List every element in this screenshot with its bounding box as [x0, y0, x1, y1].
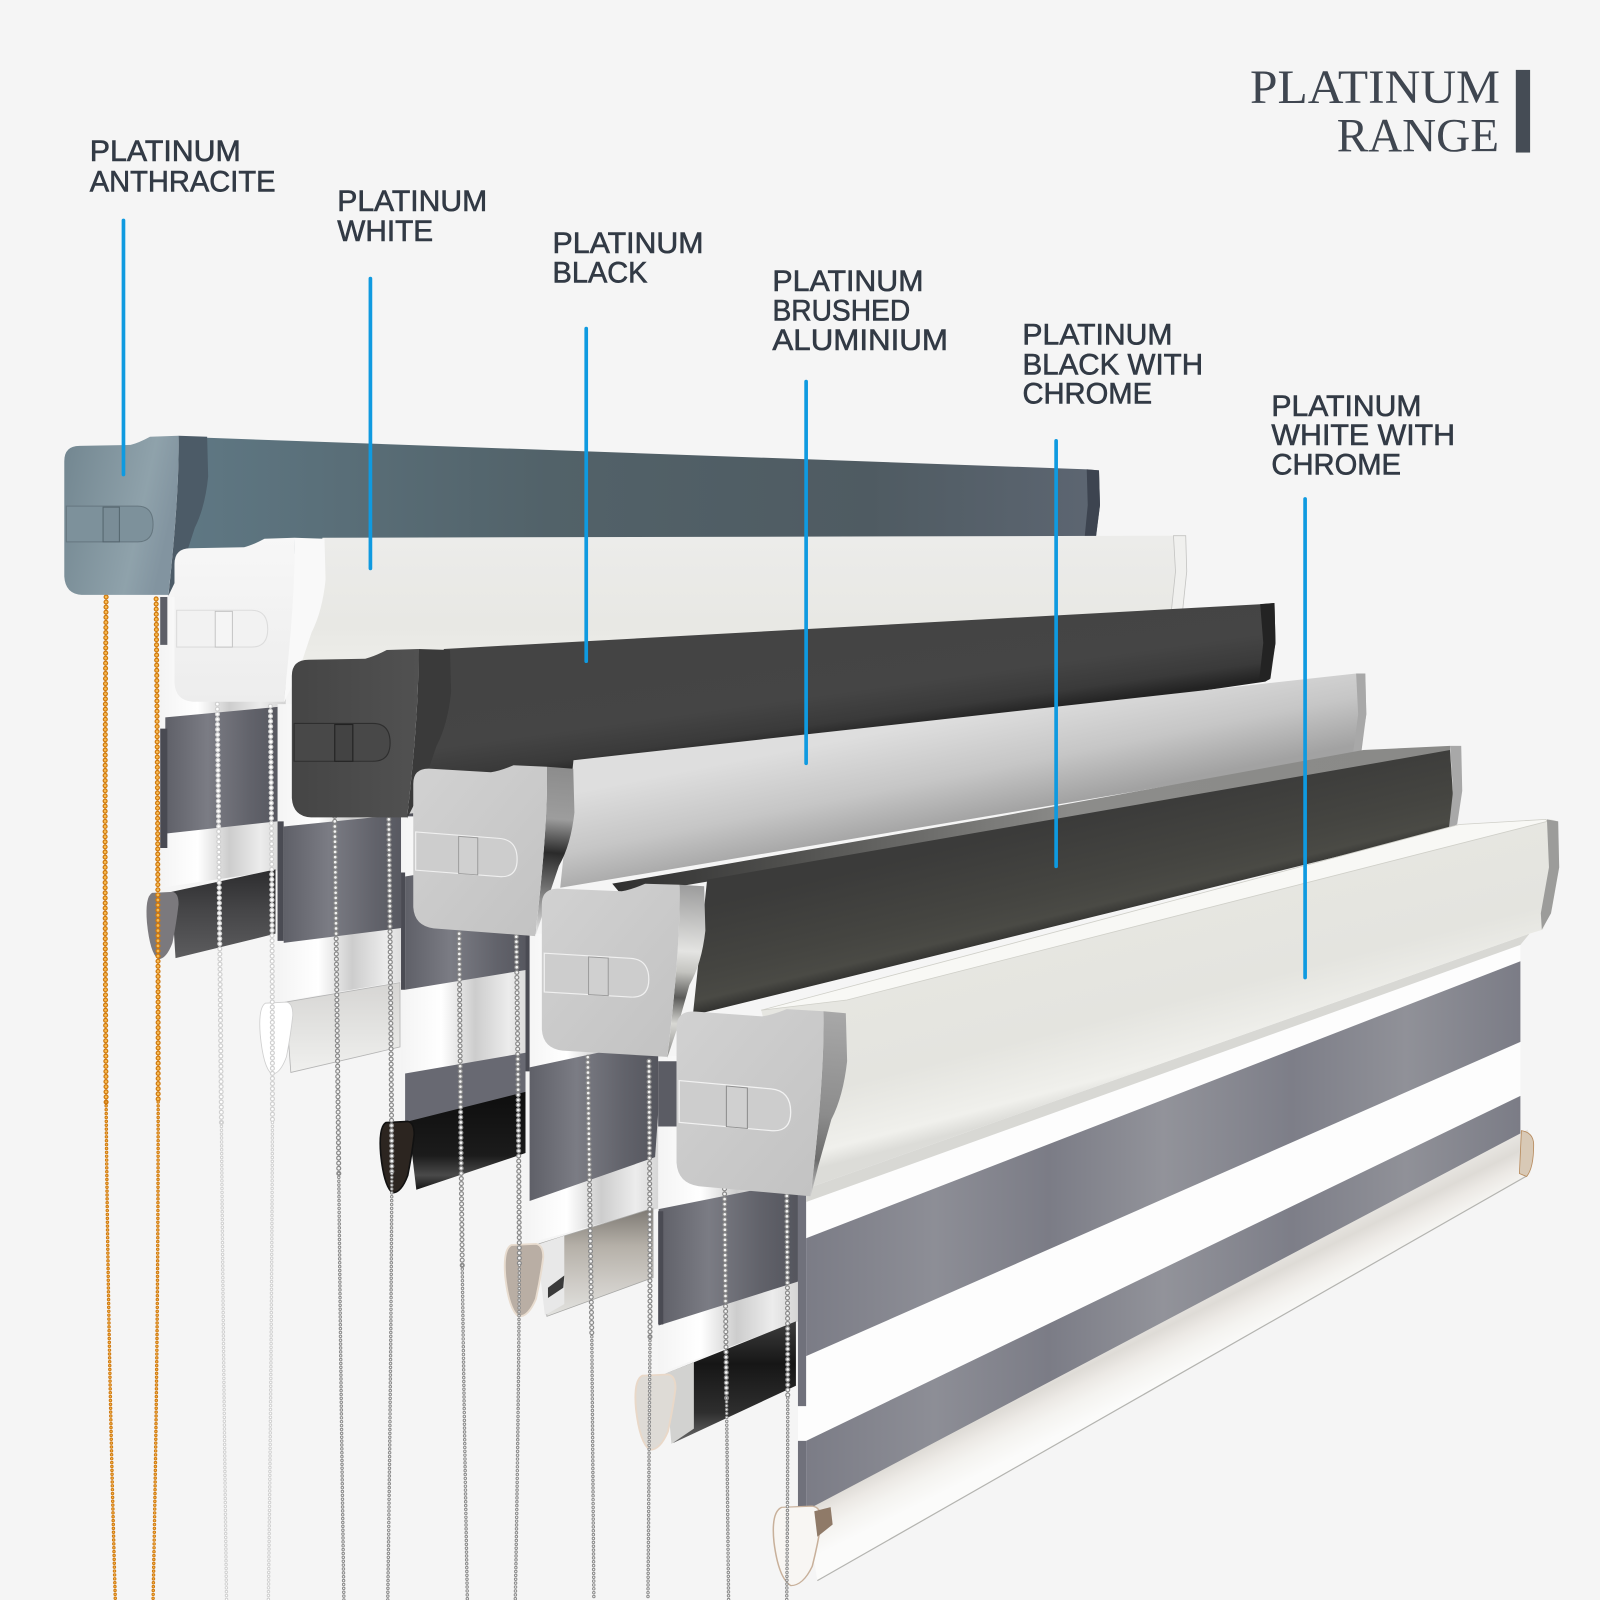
- label: platinum anthracite: ANTHRACITE: [90, 165, 276, 198]
- head bracket: brushed aluminium: [413, 756, 574, 940]
- top ridge: black with chrome rail: [612, 746, 1450, 896]
- head bracket: white: [174, 538, 326, 703]
- fabric: anthracite blind: [160, 597, 286, 888]
- head bracket: black with chrome: [542, 877, 705, 1060]
- title: PLATINUM: [1250, 61, 1500, 114]
- end cap: black with chrome rail: [1449, 746, 1462, 828]
- chains: white with chrome blind: [724, 1184, 788, 1600]
- fabric: black blind: [401, 816, 536, 1122]
- blind: platinum brushed aluminium: [413, 673, 1366, 1600]
- label: platinum white: WHITE: [337, 215, 433, 248]
- label: platinum black with chrome: [1022, 318, 1203, 411]
- end cap: brushed aluminium rail: [1353, 673, 1366, 753]
- label: platinum white with chrome: [1271, 390, 1455, 481]
- headrail: black: [408, 603, 1276, 806]
- blind: platinum white: [174, 536, 1187, 1600]
- end cap: black rail: [1259, 603, 1276, 681]
- chains: black with chrome blind: [588, 1057, 650, 1600]
- label: platinum white with chrome: WHITE WITH: [1271, 419, 1455, 452]
- callout line: white: [369, 279, 372, 568]
- top strip: white with chrome rail: [761, 819, 1547, 1010]
- fabric: white blind: [278, 704, 413, 1002]
- headrail: white: [296, 536, 1187, 686]
- label: platinum black with chrome: CHROME: [1022, 378, 1152, 411]
- head bracket: anthracite: [64, 436, 208, 596]
- callout line: black: [584, 329, 588, 661]
- bottom bar: white with chrome blind: [773, 1130, 1534, 1586]
- label: platinum black: PLATINUM: [553, 227, 704, 260]
- callout line: brushed aluminium: [804, 382, 808, 763]
- label: platinum brushed aluminium: [772, 265, 948, 357]
- label: platinum white with chrome: CHROME: [1271, 448, 1401, 481]
- label: platinum black with chrome: BLACK WITH: [1022, 348, 1203, 381]
- label: platinum anthracite: PLATINUM: [90, 135, 241, 168]
- label: platinum brushed aluminium: BRUSHED: [772, 294, 910, 327]
- blind: platinum black with chrome: [542, 746, 1462, 1600]
- chains: black blind: [335, 816, 392, 1600]
- chains: orange: [105, 597, 158, 1600]
- blind: platinum anthracite: [64, 436, 1100, 1600]
- title: [1250, 61, 1500, 163]
- end cap: white rail: [1171, 536, 1187, 610]
- callout line: black with chrome: [1054, 441, 1058, 866]
- headrail: black with chrome: [693, 750, 1455, 1015]
- chains: brushed aluminium blind: [459, 934, 519, 1600]
- callout line: white with chrome: [1303, 499, 1307, 978]
- label: platinum anthracite: [90, 135, 276, 198]
- bottom bar: black with chrome blind: [635, 1321, 796, 1450]
- title accent bar: [1516, 70, 1530, 153]
- bottom bar: black blind: [380, 1092, 526, 1193]
- bottom bar: anthracite blind: [146, 869, 276, 959]
- label: platinum white: [337, 185, 487, 248]
- bottom bar: white blind: [260, 983, 400, 1074]
- fabric: brushed aluminium blind: [526, 934, 663, 1244]
- label: platinum white: PLATINUM: [337, 185, 487, 218]
- headrail: brushed aluminium: [560, 673, 1366, 888]
- callout line: anthracite: [122, 220, 125, 474]
- head bracket: black: [292, 649, 451, 818]
- chains: white: [217, 704, 272, 1600]
- title: RANGE: [1337, 110, 1499, 163]
- label: platinum black with chrome: PLATINUM: [1022, 318, 1172, 351]
- blind: platinum black: [292, 603, 1276, 1600]
- blind: platinum white with chrome: [677, 819, 1559, 1600]
- label: platinum white with chrome: PLATINUM: [1271, 390, 1421, 423]
- headrail: white with chrome: [761, 819, 1559, 1189]
- end cap: white with chrome rail: [1541, 819, 1559, 930]
- label: platinum brushed aluminium: ALUMINIUM: [772, 324, 948, 357]
- fabric: black with chrome blind: [658, 1056, 801, 1373]
- end cap: anthracite rail: [1085, 469, 1100, 537]
- bottom bar: brushed aluminium blind: [505, 1208, 653, 1317]
- head bracket: white with chrome: [677, 998, 847, 1201]
- label: platinum black: [553, 227, 704, 290]
- headrail: anthracite: [179, 438, 1100, 556]
- label: platinum black: BLACK: [553, 257, 648, 290]
- fabric: white with chrome blind: [798, 934, 1530, 1515]
- label: platinum brushed aluminium: PLATINUM: [772, 265, 923, 298]
